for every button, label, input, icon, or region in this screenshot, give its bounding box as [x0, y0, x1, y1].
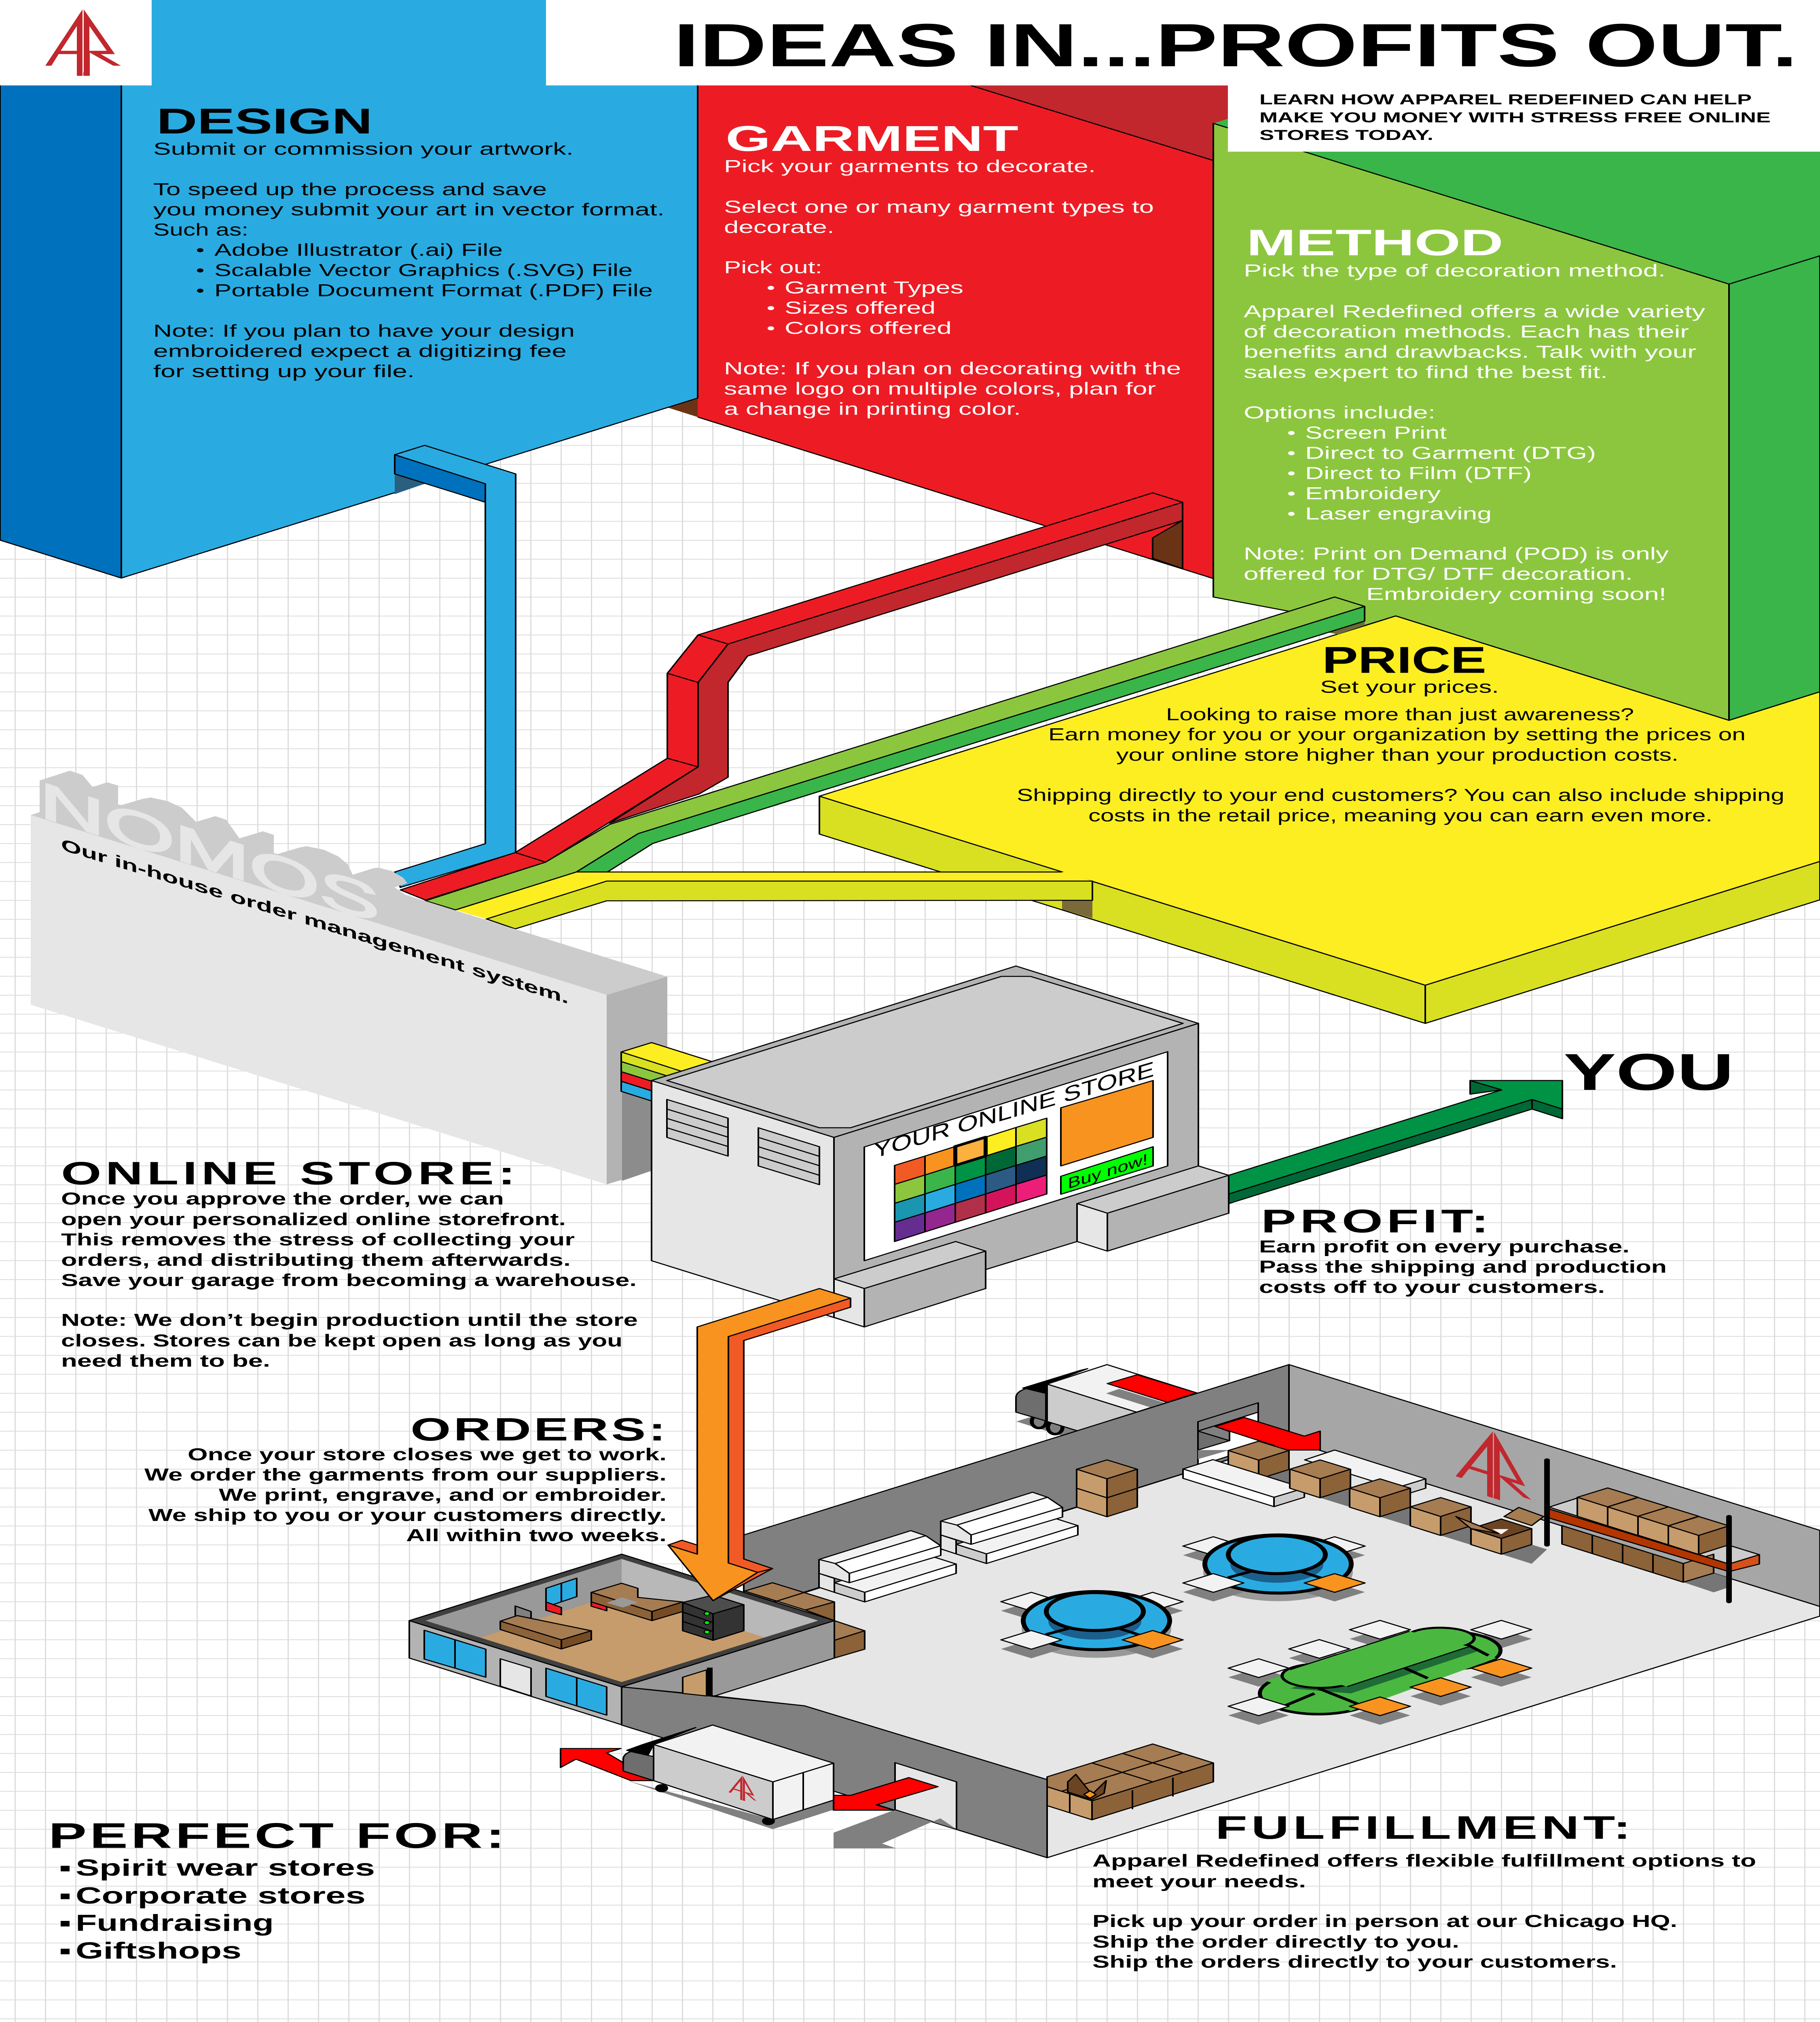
design text: for setting up your file.	[153, 362, 415, 381]
blue table 1	[1183, 1535, 1365, 1601]
online store text: ONLINE STORE:	[61, 1155, 515, 1191]
price text	[1017, 639, 1784, 825]
perfect for list: Spirit wear stores	[76, 1855, 375, 1881]
method text: Laser engraving	[1305, 504, 1492, 523]
loading door	[834, 1763, 957, 1849]
perfect for list	[49, 1816, 505, 1964]
method text: Direct to Garment (DTG)	[1305, 444, 1596, 463]
online store text: closes. Stores can be kept open as long as you	[61, 1331, 622, 1350]
online store text: Once you approve the order, we can	[61, 1189, 504, 1208]
garment text: Colors offered	[785, 319, 952, 338]
design text: Scalable Vector Graphics (.SVG) File	[214, 261, 633, 280]
office windows	[424, 1578, 607, 1715]
store sign: YOUR ONLINE STORE	[874, 1057, 1154, 1163]
upper truck	[1016, 1364, 1197, 1436]
panel: price plate	[819, 616, 1820, 1024]
blue table 2	[1001, 1592, 1183, 1658]
garment text: decorate.	[724, 218, 834, 237]
blue pipe	[395, 445, 516, 887]
panel: method	[1213, 118, 1820, 720]
nomos letters: NOMOS	[40, 771, 379, 933]
garment text	[724, 119, 1181, 419]
panel: garment	[667, 0, 1230, 579]
fulfillment text	[1092, 1809, 1756, 1971]
price text: Looking to raise more than just awareness?	[1166, 705, 1634, 724]
orders text: We ship to you or your customers directly.	[148, 1506, 667, 1525]
green pipe	[425, 597, 1365, 910]
price text: Earn money for you or your organization by setting the prices on	[1048, 725, 1746, 744]
perfect for list: Giftshops	[76, 1938, 241, 1964]
method text: benefits and drawbacks. Talk with your	[1244, 343, 1696, 362]
method text: Screen Print	[1305, 423, 1447, 442]
orders text: All within two weeks.	[406, 1526, 667, 1545]
profit text	[1259, 1203, 1667, 1297]
method text: Embroidery	[1305, 484, 1441, 503]
garment text: Pick out:	[724, 258, 822, 277]
green profit arrow	[1229, 1081, 1562, 1203]
price text: costs in the retail price, meaning you can earn even more.	[1088, 806, 1712, 825]
yellow pipe	[455, 872, 1092, 929]
design text: you money submit your art in vector format.	[153, 200, 665, 219]
garment text: Sizes offered	[785, 298, 935, 317]
method text: Direct to Film (DTF)	[1305, 464, 1532, 483]
red pipe	[400, 493, 1183, 900]
garment text: Garment Types	[785, 278, 963, 297]
design text: Adobe Illustrator (.ai) File	[214, 241, 503, 260]
office doors	[500, 1659, 713, 1696]
fulfillment text: Ship the order directly to you.	[1092, 1933, 1459, 1952]
online store text: orders, and distributing them afterwards.	[61, 1251, 571, 1270]
method text: Pick the type of decoration method.	[1244, 261, 1666, 280]
warehouse	[409, 1364, 1820, 1858]
icon: company logo	[45, 9, 121, 76]
design text: Submit or commission your artwork.	[153, 140, 574, 159]
design text: DESIGN	[157, 102, 372, 141]
office boxes	[745, 1583, 865, 1658]
buy button	[1061, 1147, 1153, 1194]
red inbound arrow	[1215, 1417, 1320, 1450]
intro text: LEARN HOW APPAREL REDEFINED CAN HELP	[1259, 92, 1752, 108]
office building	[409, 1554, 834, 1725]
profit text: PROFIT:	[1261, 1203, 1489, 1239]
design text: Note: If you plan to have your design	[153, 321, 575, 341]
panel: nomos wall	[31, 771, 667, 1184]
nomos caption: Our in-house order management system.	[61, 835, 569, 1007]
perfect for list: Fundraising	[76, 1910, 274, 1936]
method text: sales expert to find the best fit.	[1244, 363, 1608, 382]
online store text: This removes the stress of collecting your	[61, 1230, 575, 1249]
warehouse floor	[715, 1440, 1820, 1858]
profit text: costs off to your customers.	[1259, 1277, 1605, 1297]
method text: of decoration methods. Each has their	[1244, 322, 1689, 341]
open box	[1456, 1508, 1544, 1554]
orders text: We print, engrave, and or embroider.	[219, 1486, 667, 1505]
method text: METHOD	[1246, 222, 1503, 263]
green table	[1228, 1620, 1532, 1725]
pipes entering store	[621, 1043, 713, 1101]
profit text: Pass the shipping and production	[1259, 1257, 1667, 1277]
office desk back	[591, 1583, 683, 1621]
orange orders arrow	[668, 1288, 851, 1601]
method text: Apparel Redefined offers a wide variety	[1244, 302, 1706, 321]
price text: PRICE	[1322, 639, 1486, 681]
office desk front	[500, 1602, 591, 1649]
server rack	[683, 1595, 744, 1640]
price text: your online store higher than your production costs.	[1116, 746, 1678, 765]
header band	[0, 0, 1820, 152]
orders text: We order the garments from our suppliers.	[144, 1466, 667, 1485]
online store text: Note: We don’t begin production until the store	[61, 1311, 638, 1330]
back left wall	[744, 1364, 1289, 1611]
online store text: open your personalized online storefront.	[61, 1210, 566, 1229]
intro text: STORES TODAY.	[1259, 127, 1433, 143]
outbound left arrow	[561, 1749, 654, 1781]
store base box left	[834, 1242, 986, 1327]
product color swatches	[895, 1118, 1047, 1242]
method text: Options include:	[1244, 403, 1435, 422]
title: IDEAS IN...PROFITS OUT.	[673, 11, 1798, 79]
orders text: Once your store closes we get to work.	[188, 1445, 667, 1464]
intro text: MAKE YOU MONEY WITH STRESS FREE ONLINE	[1259, 110, 1771, 125]
screen printing machine 2	[941, 1492, 1078, 1563]
orders text	[144, 1411, 667, 1545]
price text: Set your prices.	[1320, 678, 1499, 697]
garment text: GARMENT	[726, 119, 1018, 159]
pallets	[1183, 1441, 1426, 1507]
right wall	[1289, 1364, 1820, 1606]
front wall	[622, 1687, 1047, 1858]
screen printing machine 1	[819, 1531, 956, 1602]
orders text: ORDERS:	[411, 1411, 666, 1447]
store screen: Buy now!	[1068, 1150, 1148, 1192]
method text: offered for DTG/ DTF decoration.	[1244, 565, 1633, 584]
product preview	[1061, 1081, 1153, 1166]
profit text: Earn profit on every purchase.	[1259, 1237, 1630, 1256]
online store building	[652, 966, 1229, 1327]
perfect for list: PERFECT FOR:	[49, 1816, 505, 1855]
you label: YOU	[1564, 1043, 1734, 1101]
fulfillment text: Ship the orders directly to your customers.	[1092, 1952, 1617, 1971]
fulfillment text: meet your needs.	[1092, 1872, 1306, 1891]
garment text: Select one or many garment types to	[724, 198, 1154, 217]
fulfillment text: FULFILLMENT:	[1215, 1809, 1631, 1846]
shelf rack	[1544, 1458, 1759, 1603]
garment text: a change in printing color.	[724, 400, 1021, 419]
design text: To speed up the process and save	[153, 180, 547, 199]
design text: Such as:	[153, 220, 248, 239]
stacked boxes	[1077, 1460, 1471, 1536]
dock door	[1198, 1403, 1258, 1466]
lower truck	[561, 1725, 834, 1829]
store screen	[864, 1052, 1168, 1261]
outbound bottom arrow	[834, 1778, 938, 1810]
method text	[1244, 222, 1706, 604]
garment text: Pick your garments to decorate.	[724, 157, 1096, 176]
store base box right	[1077, 1166, 1229, 1251]
online store text: need them to be.	[61, 1352, 270, 1371]
design text: embroidered expect a digitizing fee	[153, 342, 567, 361]
online store text	[61, 1155, 638, 1371]
design text: Portable Document Format (.PDF) File	[214, 281, 653, 300]
design text	[153, 102, 665, 381]
vents	[667, 1100, 819, 1184]
panel: design	[0, 0, 698, 578]
fulfillment text: Apparel Redefined offers flexible fulfillment options to	[1092, 1851, 1756, 1870]
floor shadows	[1259, 1470, 1729, 1593]
perfect for list: Corporate stores	[76, 1883, 366, 1909]
wall logo	[1456, 1420, 1531, 1510]
box pile	[1047, 1744, 1213, 1820]
method text: Embroidery coming soon!	[1366, 585, 1666, 604]
garment text: Note: If you plan on decorating with the	[724, 359, 1181, 378]
fulfillment text: Pick up your order in person at our Chicago HQ.	[1092, 1912, 1677, 1931]
method text: Note: Print on Demand (POD) is only	[1244, 544, 1669, 563]
online store text: Save your garage from becoming a warehouse.	[61, 1271, 637, 1290]
garment text: same logo on multiple colors, plan for	[724, 379, 1156, 398]
intro text	[1259, 92, 1771, 143]
